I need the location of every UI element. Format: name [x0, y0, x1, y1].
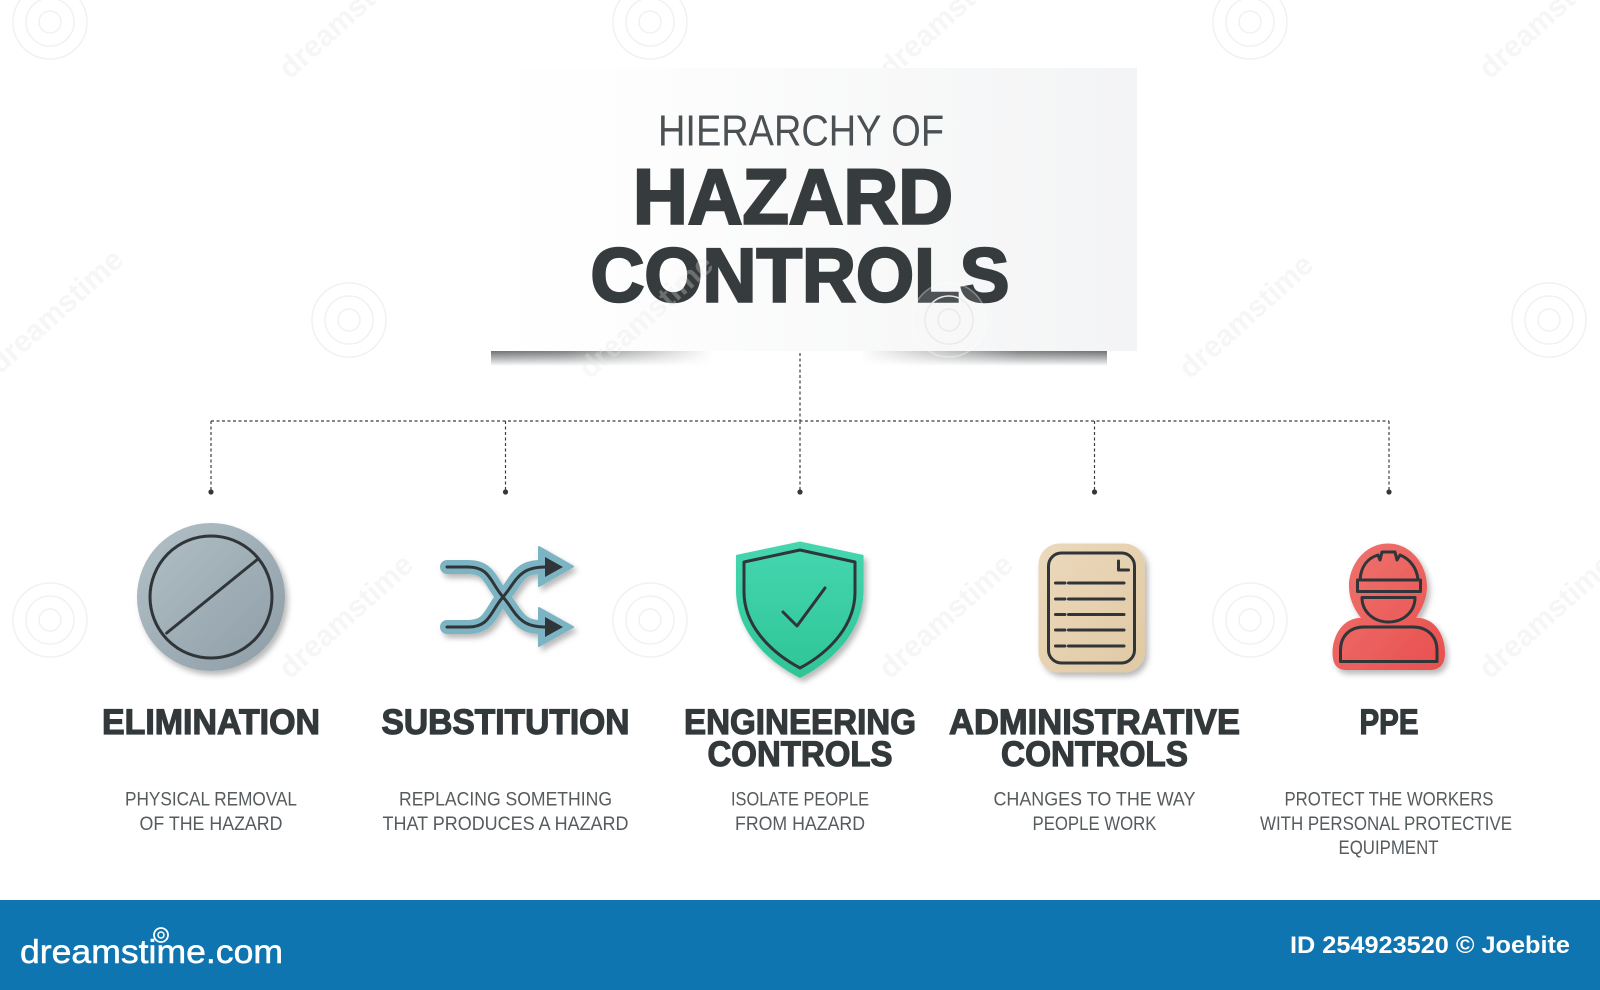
description: administrative controls: PEOPLE WORK — [1032, 813, 1156, 835]
description: engineering controls: ISOLATE PEOPLE — [731, 788, 869, 810]
icon: elimination prohibited circle — [137, 523, 285, 671]
label: administrative controls: ADMINISTRATIVE — [949, 703, 1240, 742]
description: elimination: PHYSICAL REMOVAL — [125, 788, 297, 810]
icon: administrative document — [1038, 544, 1145, 672]
title: hazard controls: CONTROLS — [590, 234, 1010, 318]
card watermark overlay: dreamstime — [573, 248, 720, 385]
footer credit: ID 254923520 © Joebite — [1290, 932, 1570, 959]
icon: substitution crossing arrows — [447, 547, 573, 646]
label: administrative controls — [949, 703, 1240, 774]
icon: ppe worker with hard hat — [1332, 544, 1445, 670]
description: engineering controls — [731, 788, 869, 835]
title: hazard controls — [590, 152, 1010, 318]
title: hierarchy of: HIERARCHY OF — [658, 106, 944, 156]
icon: engineering controls shield — [736, 542, 864, 678]
connector lines — [208, 353, 1392, 495]
description: substitution: THAT PRODUCES A HAZARD — [382, 813, 628, 835]
description: engineering controls: FROM HAZARD — [735, 813, 865, 835]
footer logo: dreamstime.com — [20, 933, 283, 970]
description: substitution: REPLACING SOMETHING — [399, 788, 612, 810]
description: ppe: EQUIPMENT — [1338, 837, 1439, 859]
description: ppe — [1260, 788, 1512, 859]
description: ppe: WITH PERSONAL PROTECTIVE — [1260, 813, 1512, 835]
description: substitution — [382, 788, 628, 835]
label: administrative controls: CONTROLS — [1001, 735, 1188, 774]
label: substitution: SUBSTITUTION — [382, 703, 630, 742]
card watermark overlay — [573, 248, 986, 385]
title: hazard controls: HAZARD — [633, 152, 953, 240]
description: ppe: PROTECT THE WORKERS — [1284, 788, 1494, 810]
description: administrative controls — [994, 788, 1196, 835]
watermark pattern — [0, 0, 1600, 685]
description: elimination: OF THE HAZARD — [140, 813, 282, 835]
watermark pattern: dreamstime — [873, 548, 1020, 685]
description: elimination — [125, 788, 297, 835]
label: elimination: ELIMINATION — [102, 703, 320, 742]
label: engineering controls: ENGINEERING — [684, 703, 916, 742]
watermark pattern: dreamstime — [273, 548, 420, 685]
label: engineering controls — [684, 703, 916, 774]
watermark pattern: dreamstime — [1173, 248, 1320, 385]
description: administrative controls: CHANGES TO THE WAY — [994, 788, 1196, 810]
title card — [490, 68, 1137, 367]
label: ppe: PPE — [1360, 703, 1418, 742]
label: engineering controls: CONTROLS — [708, 735, 892, 774]
footer bar — [0, 900, 1600, 990]
